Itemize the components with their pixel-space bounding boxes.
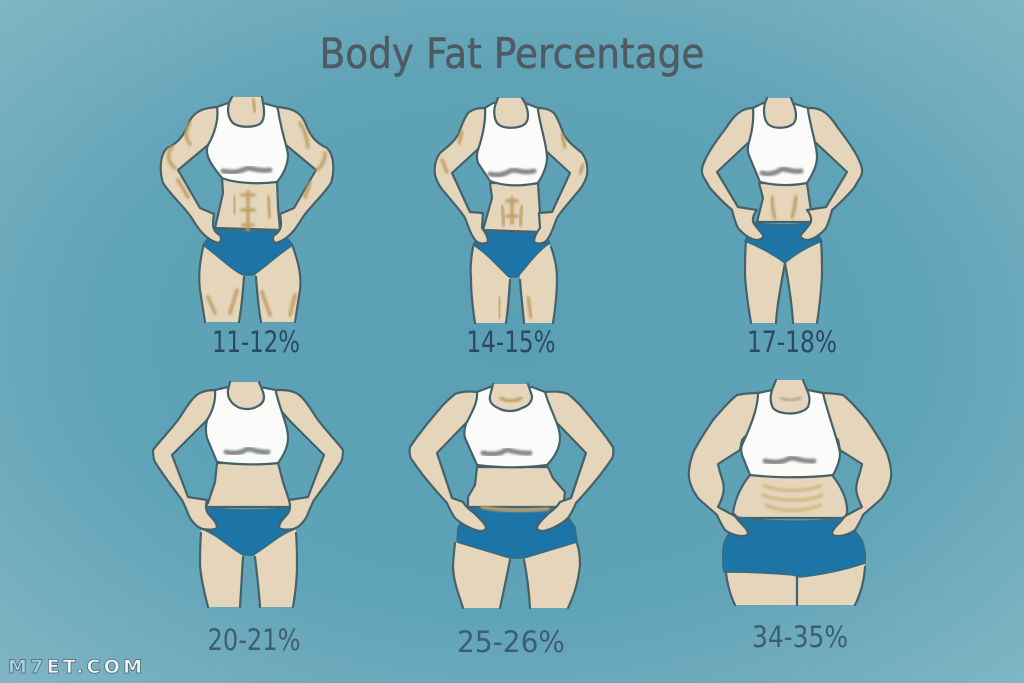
left arm: [435, 108, 491, 244]
neck: [494, 98, 528, 128]
legs: [726, 560, 865, 605]
briefs: [473, 230, 550, 277]
left leg: [200, 522, 243, 607]
label: 17-18%: 17-18%: [747, 325, 837, 359]
neck: [764, 98, 796, 128]
right arm: [537, 392, 613, 531]
label: 20-21%: 20-21%: [208, 623, 300, 657]
left arm: [410, 392, 486, 531]
left leg: [199, 238, 244, 322]
torso: [757, 183, 812, 222]
right arm: [274, 390, 343, 530]
top: [477, 103, 547, 185]
muscle shading: [169, 100, 325, 315]
right arm: [269, 107, 333, 243]
top fold: [223, 168, 270, 172]
torso: [205, 463, 292, 507]
briefs: [203, 228, 293, 275]
title: Body Fat Percentage: [320, 29, 704, 78]
top: [741, 390, 840, 477]
right arm: [816, 393, 891, 536]
left arm: [702, 108, 763, 240]
figure: 17-18%: [702, 98, 862, 323]
label: 11-12%: 11-12%: [212, 325, 300, 359]
right leg: [785, 232, 822, 323]
briefs: [723, 517, 865, 577]
torso: [733, 475, 847, 518]
top fold: [483, 450, 530, 454]
briefs: [745, 222, 822, 263]
label: 14-15%: 14-15%: [466, 325, 556, 359]
briefs: [202, 507, 295, 555]
top: [464, 387, 560, 467]
right arm: [531, 108, 587, 244]
label: 25-26%: 25-26%: [457, 625, 565, 659]
torso: [483, 183, 542, 232]
right leg: [520, 238, 557, 323]
neckline: [490, 384, 532, 411]
torso: [215, 178, 280, 230]
right arm: [801, 108, 862, 240]
left arm: [161, 107, 225, 243]
right leg: [524, 535, 580, 608]
right leg: [256, 238, 301, 322]
watermark: M7ET.COM: [8, 656, 142, 678]
ab shading: [772, 197, 796, 218]
chin crease: [782, 398, 800, 400]
neckline: [494, 98, 528, 128]
left arm: [153, 390, 222, 530]
neck: [228, 97, 264, 127]
neckline: [764, 98, 796, 128]
top: [206, 387, 288, 464]
top: [748, 103, 817, 185]
left leg: [745, 232, 785, 323]
left leg: [453, 535, 510, 608]
torso: [468, 467, 565, 507]
top fold: [226, 449, 268, 453]
chin crease: [501, 398, 521, 401]
figure: 14-15%: [435, 98, 587, 323]
top fold: [762, 169, 801, 174]
waist shading: [482, 507, 548, 511]
figure: 20-21%: [153, 382, 343, 607]
top: [207, 103, 288, 183]
muscle shading: [442, 132, 583, 317]
right leg: [255, 522, 297, 607]
briefs: [457, 507, 577, 558]
top fold: [490, 170, 534, 175]
figure: 25-26%: [410, 384, 613, 608]
top fold: [765, 458, 814, 462]
left leg: [471, 238, 510, 323]
neck: [490, 384, 532, 411]
label: 34-35%: 34-35%: [752, 620, 848, 654]
neckline: [771, 380, 809, 414]
neckline: [228, 97, 264, 127]
figure: 11-12%: [161, 97, 333, 322]
belly folds: [763, 486, 822, 510]
figure: 34-35%: [689, 380, 891, 605]
neck: [228, 382, 264, 409]
left arm: [689, 393, 764, 536]
neck: [771, 380, 809, 414]
neckline: [228, 382, 264, 409]
